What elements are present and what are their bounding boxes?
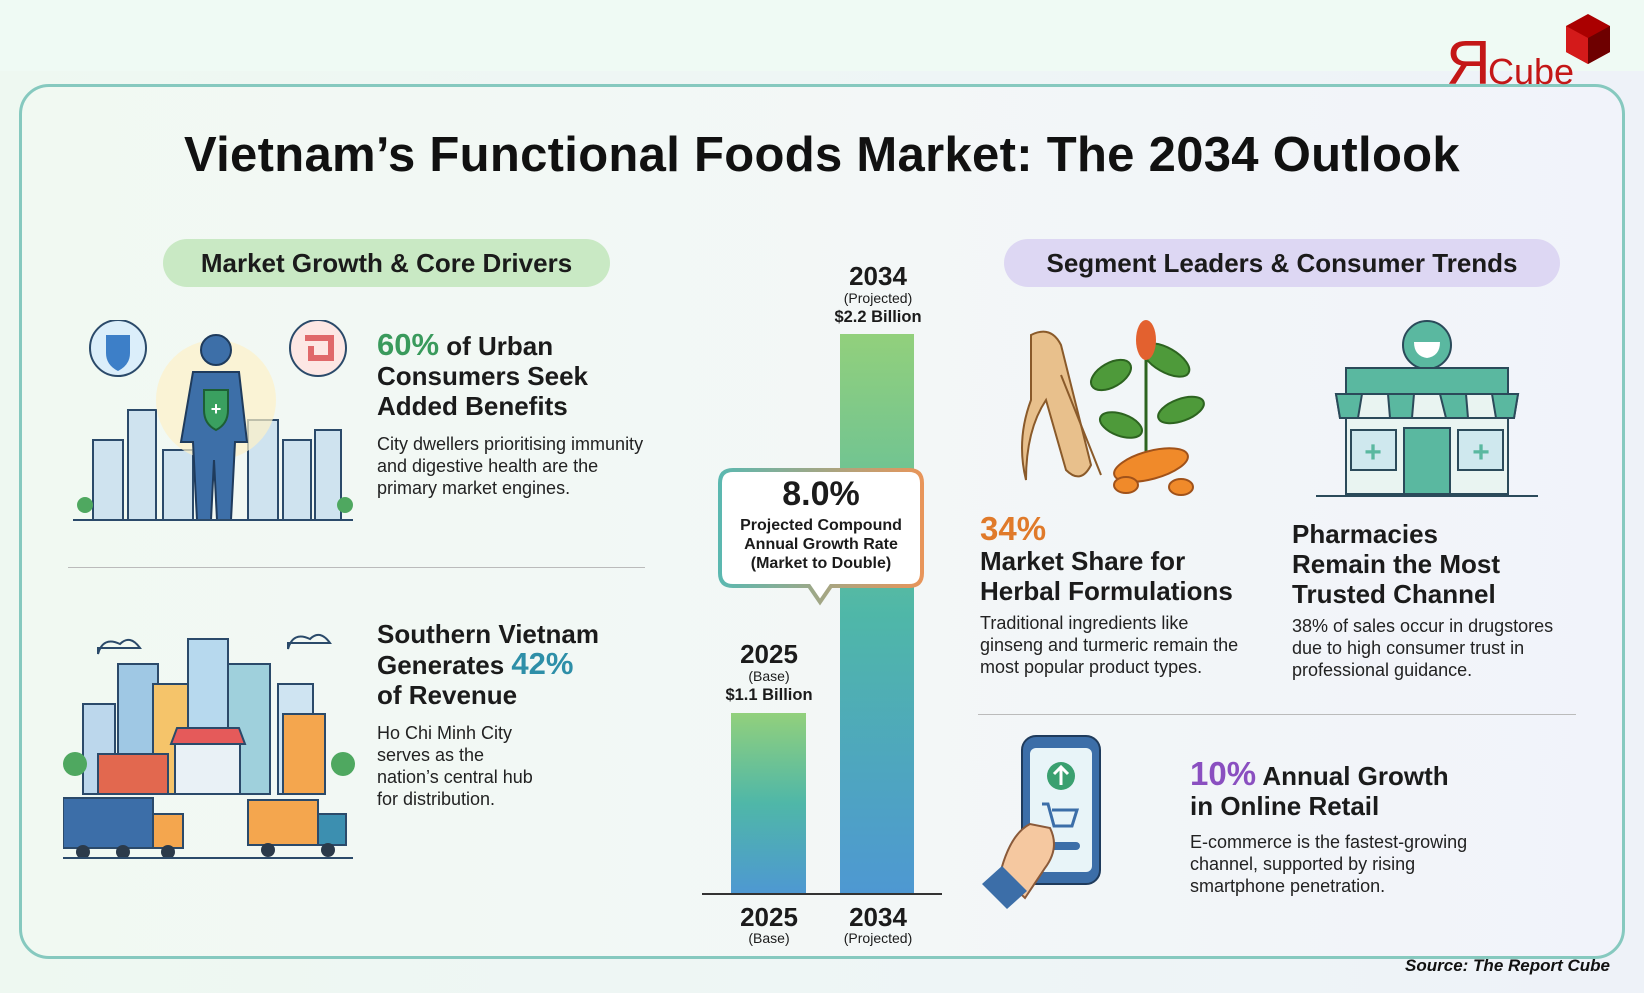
text: southern Vietnam 42% — [377, 619, 599, 809]
text: 60% urban consumers — [377, 327, 644, 498]
text: southern Vietnam 42%: serves as the — [377, 745, 484, 765]
divider right — [978, 714, 1576, 715]
text: southern Vietnam 42%: nation’s central hub — [377, 767, 533, 787]
icon: smartphone shopping — [982, 735, 1101, 909]
text: 60% urban consumers: 60% of Urban — [377, 327, 553, 362]
text: 34% herbal: Herbal Formulations — [980, 576, 1233, 606]
text: 34% herbal — [980, 510, 1238, 677]
text: southern Vietnam 42%: Southern Vietnam — [377, 619, 599, 649]
icon: pharmacy: + — [1472, 436, 1490, 469]
bar chart: (Base) — [748, 930, 790, 946]
text: 60% urban consumers: Added Benefits — [377, 391, 568, 421]
text: pharmacies: professional guidance. — [1292, 660, 1472, 680]
icon: ginseng & turmeric — [1021, 320, 1205, 496]
text: 34% herbal: 34% — [980, 510, 1046, 547]
bar chart: (Projected) — [844, 290, 912, 306]
pill: left heading — [163, 239, 610, 287]
text: pharmacies — [1292, 519, 1553, 680]
title: Vietnam’s Functional Foods Market: The 2034 Outlook — [184, 128, 1460, 182]
bar chart: (Projected) — [844, 930, 912, 946]
text: 60% urban consumers: and digestive health are the — [377, 456, 598, 476]
text: 60% urban consumers: primary market engines. — [377, 478, 570, 498]
text: southern Vietnam 42%: Ho Chi Minh City — [377, 723, 512, 743]
bar chart — [702, 261, 942, 946]
text: southern Vietnam 42%: of Revenue — [377, 680, 517, 710]
text: pharmacies: due to high consumer trust in — [1292, 638, 1524, 658]
text: 34% herbal: most popular product types. — [980, 657, 1202, 677]
text: pharmacies: Trusted Channel — [1292, 579, 1496, 609]
text: 60% urban consumers: Consumers Seek — [377, 361, 588, 391]
callout: CAGR: (Market to Double) — [751, 555, 891, 572]
text: pharmacies: Pharmacies — [1292, 519, 1438, 549]
bar chart: $1.1 Billion — [725, 686, 813, 704]
text: pharmacies: Remain the Most — [1292, 549, 1500, 579]
text: southern Vietnam 42%: for distribution. — [377, 789, 495, 809]
icon: urban health illustration — [73, 320, 353, 521]
text: pharmacies: 38% of sales occur in drugstores — [1292, 616, 1553, 636]
bar chart: 2034 — [849, 902, 907, 932]
text: 60% urban consumers: City dwellers prioritising immunity — [377, 434, 643, 454]
callout: CAGR: Projected Compound — [740, 517, 902, 534]
bar chart: (Base) — [748, 668, 790, 684]
text: 10% online retail — [1190, 755, 1467, 896]
top band — [0, 0, 1644, 71]
icon: pharmacy — [1316, 320, 1538, 497]
pill: left heading: Market Growth & Core Drivers — [201, 248, 572, 278]
bar labels: 2034 — [849, 261, 907, 291]
bar chart: $2.2 Billion — [834, 308, 922, 326]
text: 10% online retail: E-commerce is the fastest-growing — [1190, 832, 1467, 852]
bar chart: 2025 — [740, 639, 798, 669]
icon: southern city & logistics — [63, 634, 355, 859]
text: 34% herbal: Traditional ingredients like — [980, 613, 1188, 633]
icon: pharmacy: + — [1364, 436, 1382, 469]
divider left — [68, 567, 645, 568]
text: 10% online retail: smartphone penetration. — [1190, 876, 1385, 896]
text: 10% online retail: in Online Retail — [1190, 791, 1379, 821]
icon: urban health illustration: + — [211, 399, 221, 419]
text: 34% herbal: ginseng and turmeric remain the — [980, 635, 1238, 655]
callout: CAGR: Annual Growth Rate — [744, 536, 898, 553]
callout: CAGR: 8.0% — [782, 475, 860, 513]
text: 34% herbal: Market Share for — [980, 546, 1185, 576]
pill: right heading — [1004, 239, 1560, 287]
text: 10% online retail: 10% Annual Growth — [1190, 755, 1449, 792]
logo — [1446, 14, 1610, 87]
source note: Source: The Report Cube — [1405, 956, 1610, 975]
bar chart: 2025 — [740, 902, 798, 932]
callout: CAGR — [718, 468, 924, 606]
text: 10% online retail: channel, supported by rising — [1190, 854, 1415, 874]
text: southern Vietnam 42%: Generates 42% — [377, 646, 573, 681]
pill: right heading: Segment Leaders & Consumer Trends — [1046, 248, 1518, 278]
